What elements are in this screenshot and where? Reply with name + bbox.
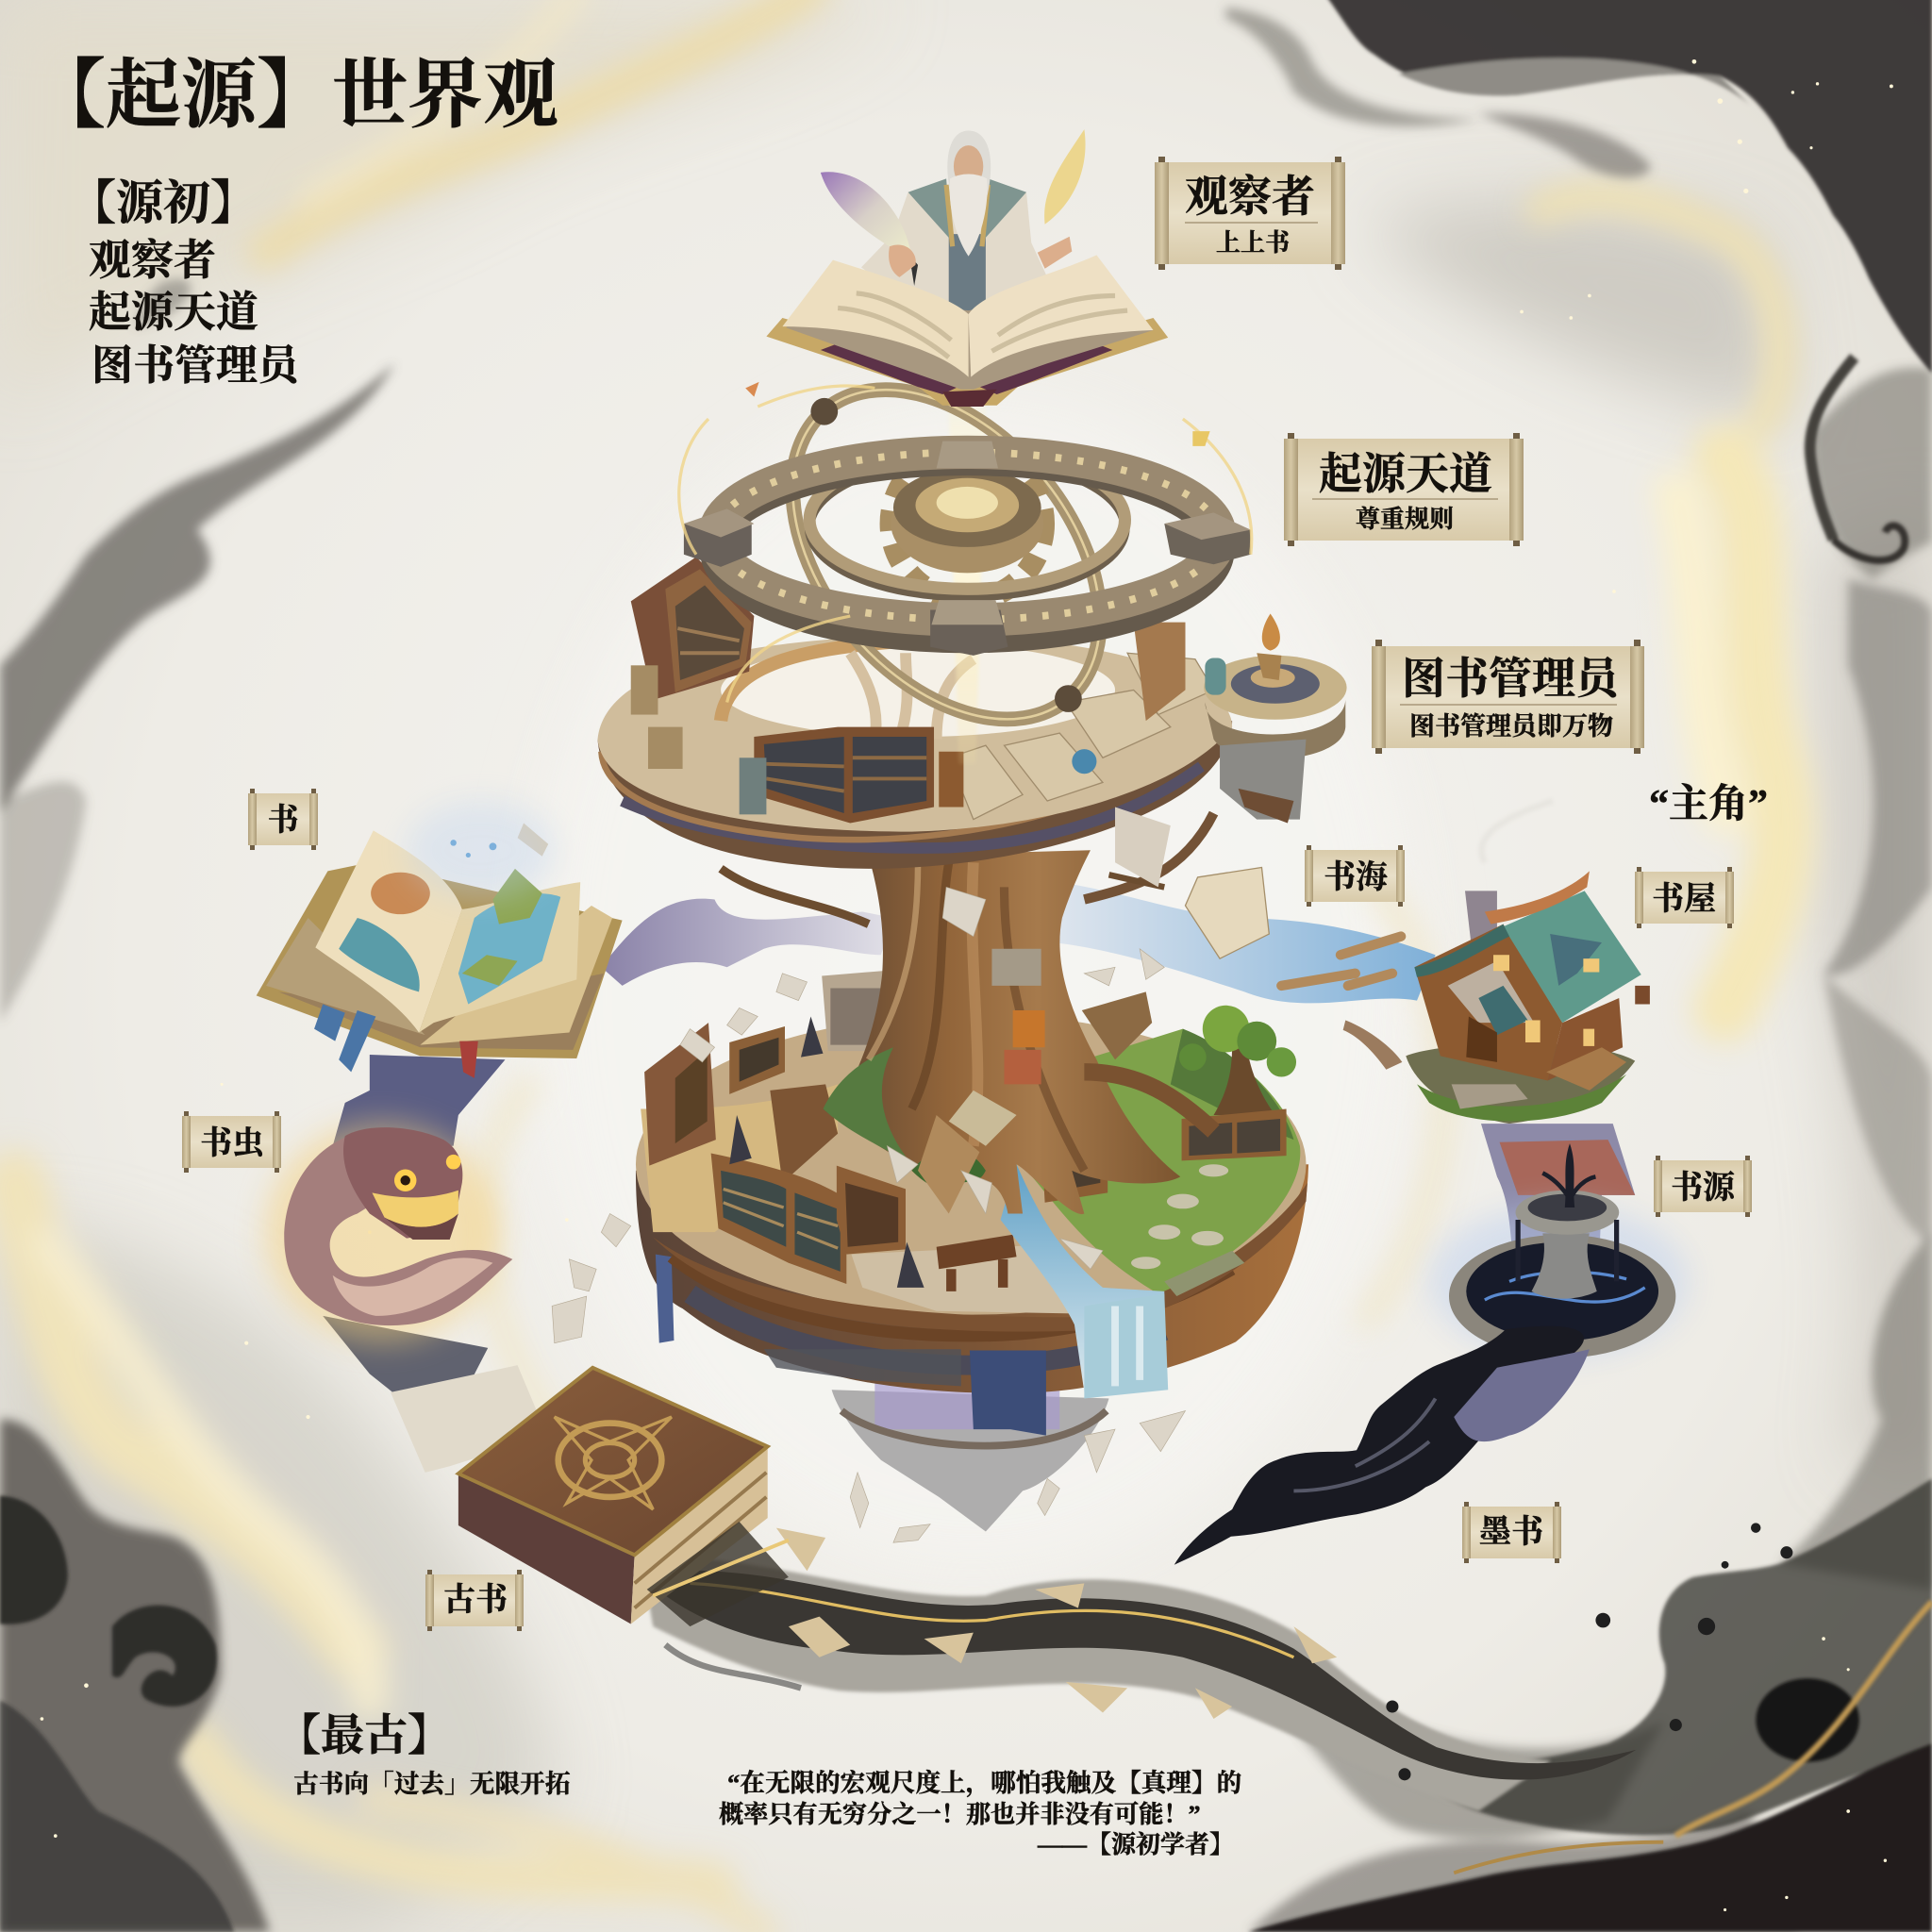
scroll label: book source: 书源 [1671, 1170, 1737, 1206]
scroll label: ancient book [425, 1570, 524, 1631]
ink fountain [1174, 1143, 1688, 1565]
lower disk [636, 970, 1308, 1436]
hand [1038, 237, 1072, 269]
quote attribution: ——【源初学者】 [1037, 1831, 1234, 1858]
observer figure [821, 129, 1086, 314]
light beam [949, 407, 986, 764]
grass [1017, 1029, 1300, 1293]
gear [891, 447, 1043, 600]
text block: origin list [69, 176, 305, 389]
scrolls on river [1185, 868, 1402, 1070]
bookworm [265, 1122, 512, 1343]
books in trunk [918, 949, 1045, 1214]
right feather [1044, 129, 1086, 225]
quote [719, 1769, 1241, 1858]
scroll label: ink book [1462, 1502, 1561, 1563]
rim [636, 1164, 1308, 1393]
blue jar [1205, 658, 1226, 695]
ink flow [1174, 1326, 1584, 1565]
scroll label: book house: 书屋 [1652, 881, 1716, 917]
flame [1262, 613, 1280, 651]
upper library disk [597, 557, 1347, 887]
book stairs [949, 653, 1214, 820]
small tree [1179, 1006, 1296, 1115]
stream: book-sea river [1047, 881, 1436, 1003]
caption: ancient book note: 古书向「过去」无限开拓 [293, 1770, 571, 1798]
floor [636, 1014, 1306, 1315]
scroll label: book sea: 书海 [1324, 859, 1388, 895]
stepping stones [1131, 1164, 1228, 1269]
left feather [821, 172, 912, 258]
outer ring [715, 460, 1220, 639]
scroll: origin heavenly dao: 起源天道 [1319, 450, 1492, 498]
scroll label: book [248, 789, 318, 850]
stream to fountain [1481, 1124, 1635, 1257]
heading: origin: 【源初】 [69, 176, 258, 229]
scroll: librarian [1372, 640, 1644, 754]
observer's open book [766, 244, 1168, 407]
side dais [1204, 653, 1347, 823]
tree trunk and roots [721, 813, 1214, 1214]
slate flow: book to worm [333, 1055, 506, 1146]
center bookcase [754, 727, 934, 823]
floating pages [552, 887, 1185, 1542]
pale branches in opening [850, 653, 974, 740]
scroll label: book: 书 [268, 803, 300, 838]
scroll label: ink book: 墨书 [1479, 1514, 1544, 1550]
list item: observer: 观察者 [89, 237, 216, 284]
figures [729, 1017, 924, 1288]
inner ring [809, 458, 1124, 596]
scroll: origin heavenly dao [1284, 433, 1524, 546]
scroll label: bookworm [182, 1111, 281, 1173]
list item: origin heavenly dao: 起源天道 [89, 289, 258, 336]
list item: librarian: 图书管理员 [92, 342, 305, 389]
quote line two: 概率只有无穷分之一！那也并非没有可能！” [719, 1801, 1201, 1828]
left bookcase [631, 557, 754, 700]
right pillar [1134, 623, 1185, 721]
scroll label: ancient book: 古书 [443, 1582, 508, 1618]
scroll label: book house [1635, 867, 1734, 928]
stream: purple book river [601, 899, 893, 986]
tilted vertical ring [731, 331, 1162, 778]
lower island spire [832, 1380, 1109, 1532]
illustration: central world-tree library [257, 129, 1792, 1811]
ancient tome ink stream [641, 1523, 1792, 1811]
robe [861, 192, 1047, 314]
scroll: observer: 上上书 [1216, 229, 1291, 257]
magic arcs [679, 386, 1252, 702]
hanging page [1115, 808, 1171, 887]
scroll: observer: 观察者 [1185, 173, 1315, 221]
beard [950, 174, 988, 257]
label: protagonist: “主角” [1649, 782, 1768, 826]
scroll: librarian: 图书管理员即万物 [1409, 712, 1613, 741]
quote line one: “在无限的宏观尺度上，哪怕我触及【真理】的 [727, 1769, 1241, 1798]
scroll: observer [1155, 157, 1345, 270]
text block: oldest [277, 1711, 571, 1798]
scroll label: book source [1654, 1156, 1752, 1217]
timber walls [1414, 924, 1562, 1080]
title: 【起源】世界观 [30, 55, 558, 138]
armillary of rules [679, 331, 1252, 778]
scroll: librarian: 图书管理员 [1402, 655, 1624, 703]
floating open book [257, 801, 623, 1078]
porch [1478, 986, 1528, 1035]
banner [970, 1351, 1046, 1436]
book stacks [631, 665, 963, 814]
scroll label: bookworm: 书虫 [200, 1125, 266, 1161]
scroll label: book sea [1305, 845, 1405, 907]
main roof [1503, 891, 1641, 1023]
hair [947, 130, 991, 197]
scroll: origin heavenly dao: 尊重规则 [1356, 506, 1454, 533]
heading: oldest: 【最古】 [277, 1711, 451, 1759]
stream and waterfall [1001, 1164, 1164, 1392]
slate flow: worm to old book [323, 1316, 488, 1398]
ring blocks [684, 441, 1251, 656]
bookshelves [644, 970, 1287, 1284]
ancient tome [391, 1365, 789, 1626]
desk [937, 1235, 1017, 1291]
cottage [1406, 801, 1650, 1124]
